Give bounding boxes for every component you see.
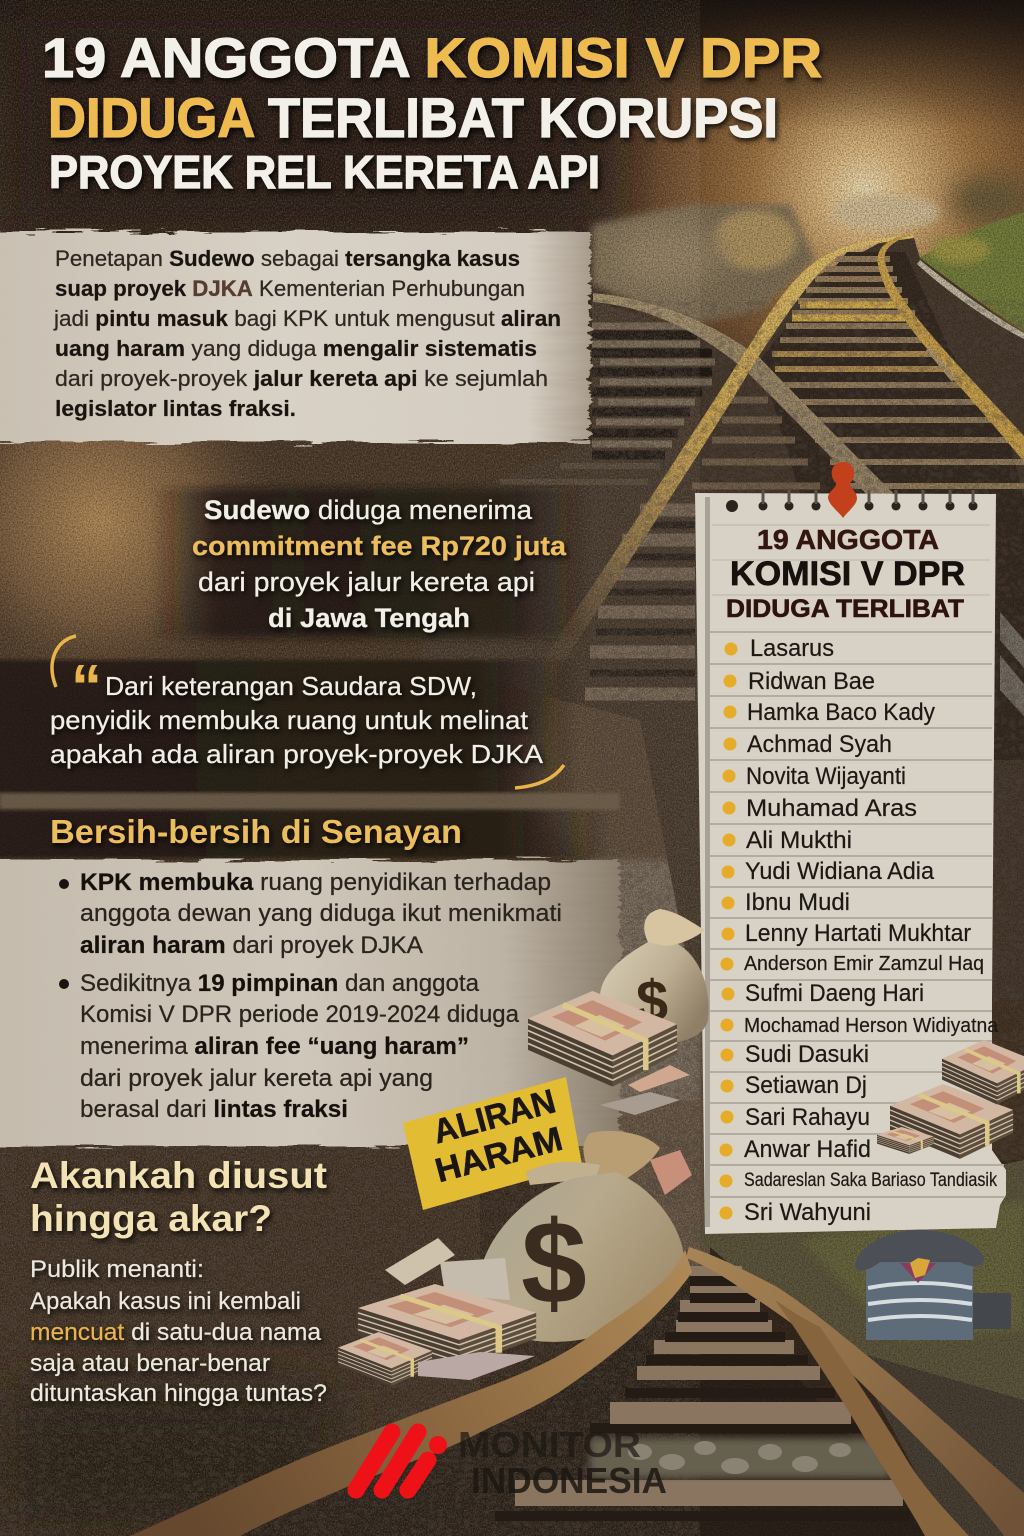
icon: binding rings	[726, 490, 978, 512]
panel: bullet points: menerima aliran fee “uang haram”	[80, 1033, 469, 1060]
quote block: apakah ada aliran proyek-proyek DJKA	[50, 739, 544, 769]
callout: commitment fee: dari proyek jalur kereta api	[198, 567, 535, 597]
ballast stones	[628, 1441, 851, 1474]
list of names: Yudi Widiana Adia	[745, 858, 935, 885]
panel: bullet points: berasal dari lintas fraksi	[80, 1096, 348, 1123]
title: DIDUGA TERLIBAT KORUPSI	[48, 86, 778, 149]
list of names: Anwar Hafid	[744, 1136, 871, 1163]
list heading: KOMISI V DPR	[730, 555, 965, 593]
sign: Aliran Haram: ALIRAN	[429, 1082, 560, 1151]
panel: intro text: Penetapan Sudewo sebagai tersangka kasus	[55, 246, 520, 271]
list of names: Achmad Syah	[747, 731, 892, 758]
list heading	[726, 524, 965, 623]
list of names: Mochamad Herson Widiyatna	[744, 1015, 999, 1037]
panel: intro text: dari proyek-proyek jalur kereta api ke sejumlah	[55, 366, 548, 391]
heading: Bersih-bersih di Senayan: Bersih-bersih di Senayan	[50, 813, 462, 850]
closing question: Akankah diusut	[30, 1155, 327, 1196]
quote block: Dari keterangan Saudara SDW,	[105, 671, 477, 701]
quote block: penyidik membuka ruang untuk melinat	[50, 705, 529, 735]
list of names: Sri Wahyuni	[744, 1199, 871, 1226]
quote block	[0, 636, 580, 793]
panel: bullet points: anggota dewan yang diduga ikut menikmati	[80, 900, 562, 927]
panel: bullet points: dari proyek jalur kereta api yang	[80, 1065, 433, 1092]
money stacks by big bag	[338, 1238, 536, 1386]
icon: red pin	[828, 462, 857, 518]
closing question: Publik menanti:	[30, 1256, 204, 1283]
big money bag	[478, 1131, 692, 1342]
panel: bullet points: Sedikitnya 19 pimpinan dan anggota	[80, 970, 480, 997]
list of names	[720, 635, 999, 1226]
title: 19 ANGGOTA KOMISI V DPR	[42, 26, 822, 89]
closing question	[30, 1155, 327, 1407]
money stack over notepad	[877, 1040, 1024, 1159]
logo: Monitor Indonesia: INDONESIA	[471, 1460, 667, 1501]
list of names: Muhamad Aras	[746, 795, 917, 822]
lower railway track	[130, 1247, 1024, 1536]
callout: commitment fee: Sudewo diduga menerima	[204, 495, 533, 525]
list of names: Sudi Dasuki	[745, 1041, 869, 1068]
list of names: Ibnu Mudi	[745, 889, 850, 916]
list of names: Hamka Baco Kady	[747, 699, 935, 726]
icon: quote mark: “	[71, 653, 102, 722]
list of names: Sufmi Daeng Hari	[745, 980, 924, 1007]
sign: Aliran Haram	[403, 1077, 582, 1210]
panel: intro text: uang haram yang diduga mengalir sistematis	[55, 336, 537, 361]
callout: commitment fee	[150, 488, 590, 638]
KPK building	[855, 1230, 1011, 1340]
notepad: member list	[695, 462, 1006, 1234]
panel: intro text	[0, 232, 590, 442]
panel: intro text: jadi pintu masuk bagi KPK untuk mengusut aliran	[53, 306, 561, 331]
closing question: mencuat di satu-dua nama	[30, 1319, 322, 1346]
list of names: Ali Mukthi	[746, 827, 852, 854]
list of names: Sari Rahayu	[745, 1104, 870, 1131]
panel: bullet points: Komisi V DPR periode 2019-2024 diduga	[80, 1001, 520, 1028]
panel: intro text: legislator lintas fraksi.	[55, 396, 296, 421]
panel: bullet points: aliran haram dari proyek DJKA	[80, 932, 423, 959]
title: PROYEK REL KERETA API	[49, 146, 600, 198]
title	[42, 26, 822, 198]
panel: intro text: suap proyek DJKA Kementerian Perhubungan	[55, 276, 525, 301]
small money bag	[600, 909, 709, 1044]
logo: Monitor Indonesia	[356, 1424, 667, 1501]
panel: bullet points: KPK membuka ruang penyidikan terhadap	[80, 869, 551, 896]
closing question: hingga akar?	[30, 1198, 272, 1239]
sign: Aliran Haram: HARAM	[431, 1120, 567, 1190]
list of names: Setiawan Dj	[745, 1072, 867, 1099]
list of names: Lasarus	[750, 635, 834, 662]
list of names: Ridwan Bae	[748, 668, 875, 695]
list heading: DIDUGA TERLIBAT	[726, 595, 964, 623]
small money bag: $	[636, 969, 668, 1034]
closing question: dituntaskan hingga tuntas?	[30, 1380, 327, 1407]
upper railway tracks	[420, 234, 1024, 1000]
callout: commitment fee: di Jawa Tengah	[268, 603, 470, 633]
list of names: Lenny Hartati Mukhtar	[745, 920, 971, 947]
list heading: 19 ANGGOTA	[757, 524, 939, 555]
big money bag: $	[521, 1197, 587, 1329]
list of names: Novita Wijayanti	[746, 763, 906, 790]
closing question: saja atau benar-benar	[30, 1350, 270, 1377]
vegetation and grass	[592, 175, 1024, 332]
panel: bullet points	[0, 860, 620, 1146]
list of names: Anderson Emir Zamzul Haq	[744, 953, 984, 975]
callout: commitment fee: commitment fee Rp720 juta	[192, 531, 567, 561]
closing question: Apakah kasus ini kembali	[30, 1288, 301, 1315]
money stacks left of notepad	[528, 991, 690, 1115]
icon: quote mark	[52, 636, 102, 722]
heading: Bersih-bersih di Senayan	[0, 793, 620, 858]
logo: Monitor Indonesia: MONITOR	[458, 1424, 641, 1465]
